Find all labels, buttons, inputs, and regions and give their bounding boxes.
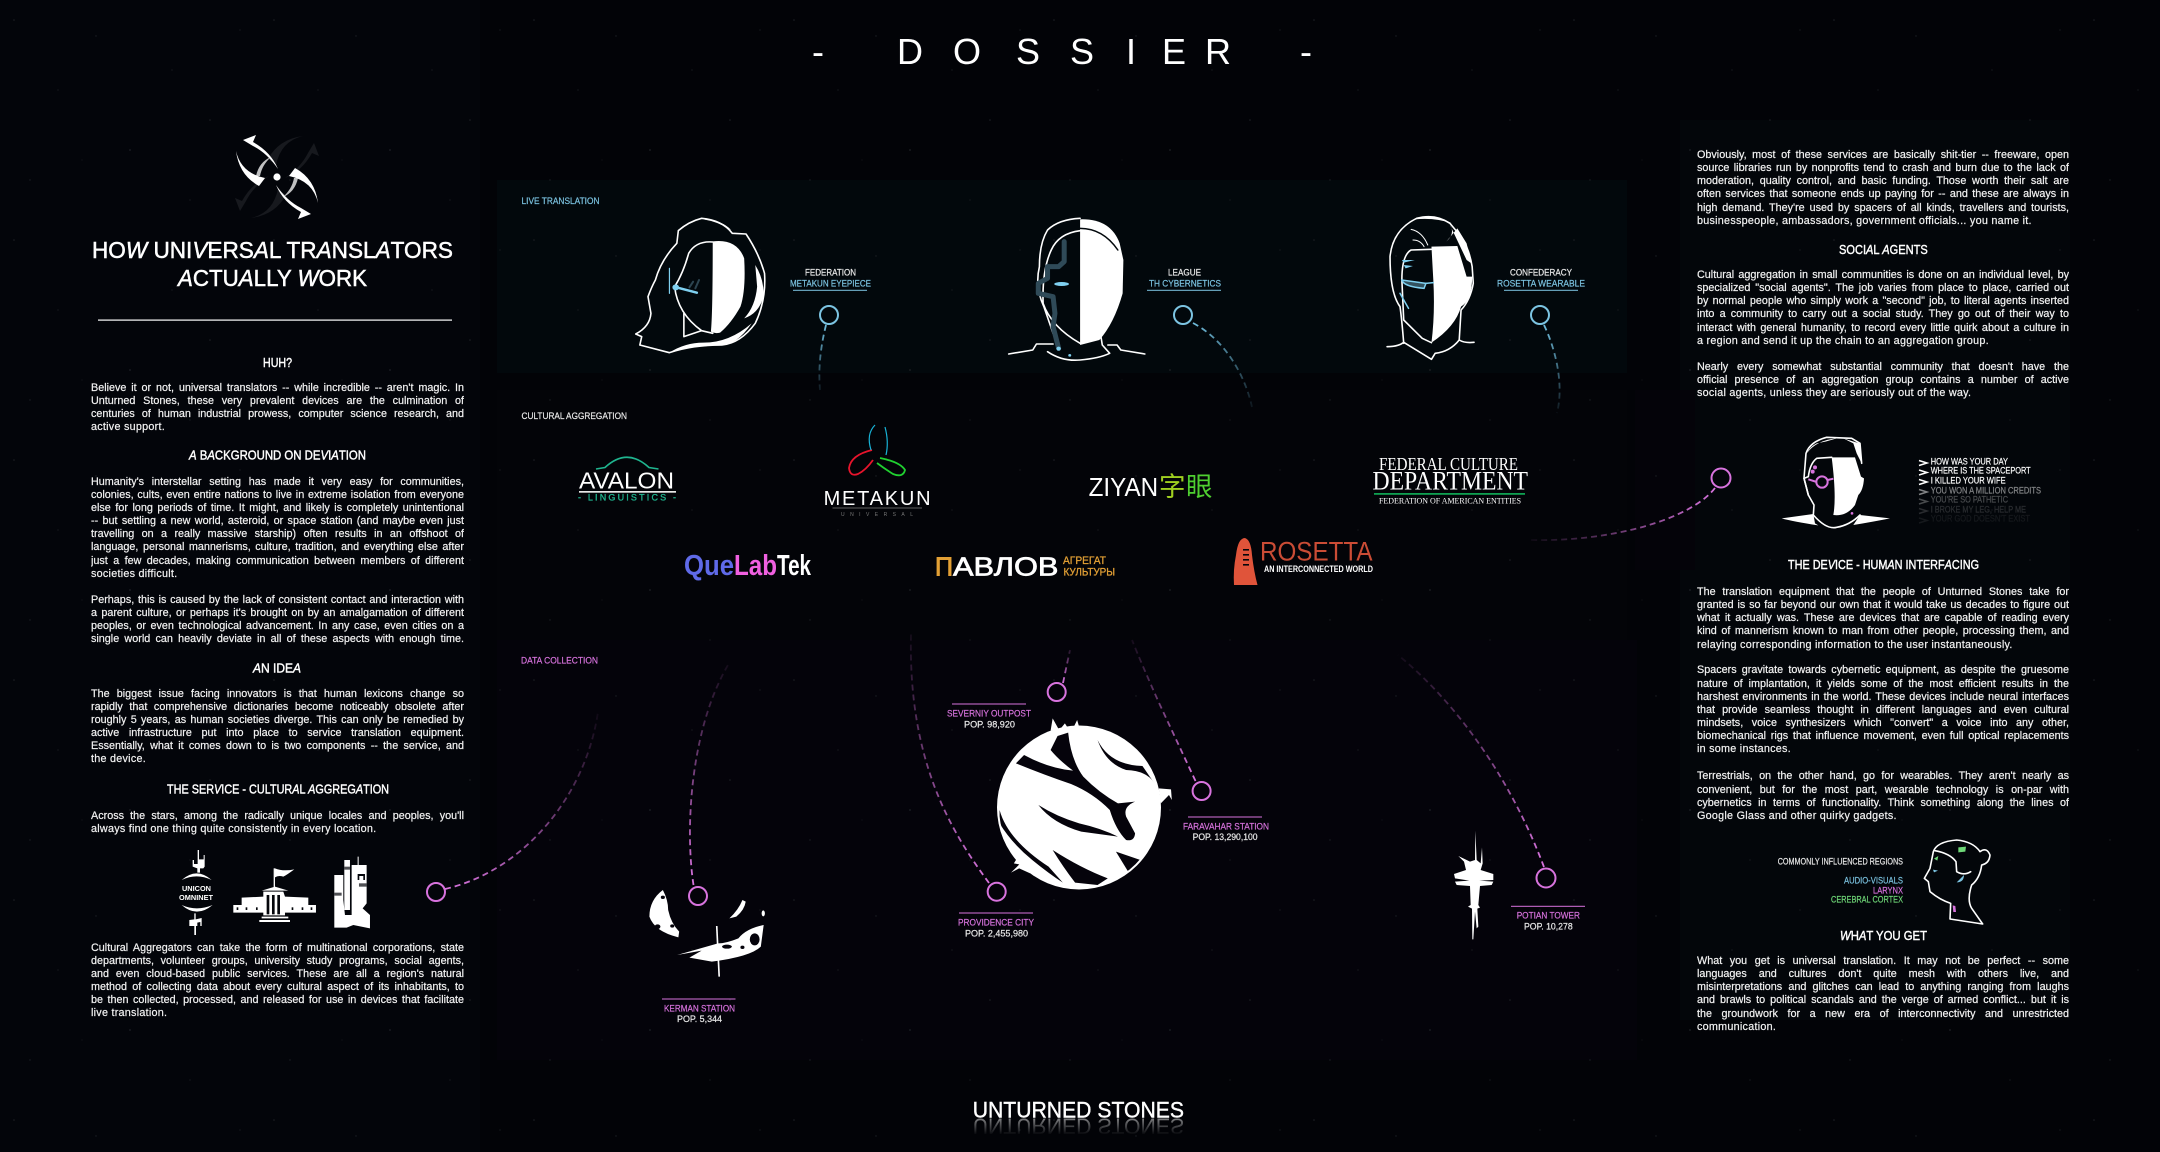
icon: kerman station asteroid	[649, 890, 765, 977]
logo: pavlov: АВЛОВ	[953, 552, 1058, 582]
label: potian tower: POP. 10,278	[1524, 921, 1573, 932]
text block: perhaps: peoples, or even technological advancement. In any case, even cities on a	[91, 620, 464, 632]
text block: spacers: mindsets, voice synthesizers which "convert" a voice into any other,	[1697, 717, 2069, 729]
icon: unicon omninet logo: OMNINET	[179, 893, 213, 902]
list: translated phrases: HOW WAS YOUR DAY	[1931, 456, 2009, 467]
label: league th cybernetics: TH CYBERNETICS	[1149, 279, 1221, 290]
text block: deviation	[91, 476, 464, 583]
icon: corporate towers	[334, 857, 370, 928]
panel: live translation background	[497, 180, 1627, 373]
text block: translation equipment	[1697, 586, 2069, 653]
icon: cybernetic head	[1782, 437, 1890, 528]
text block: across the stars: always find one thing quite consistently in every location.	[91, 823, 376, 835]
label: providence city: POP. 2,455,980	[965, 929, 1028, 940]
heading: a background on deviation: A BACKGROUND ON DEVIATION	[188, 448, 366, 462]
logo: federal culture department: DEPARTMENT	[1372, 466, 1528, 495]
text block: social agents: a region and send it up the chain to an aggregation group.	[1697, 335, 1989, 347]
callout: providence link	[911, 634, 1006, 901]
logo: quelabtek: Tek	[777, 550, 812, 582]
logo: ziyan: 眼	[1186, 472, 1212, 502]
main heading: HOW UNIVERSAL TRANSLATORS	[92, 237, 453, 263]
logo: federal culture department: FEDERATION OF AMERICAN ENTITIES	[1379, 496, 1521, 506]
text block: obviously: often services that someone ends up paying for -- and these are always in	[1697, 188, 2069, 200]
text block: terrestrials: Terrestrials, on the other hand, go for wearables. They aren't nearly as	[1697, 770, 2069, 782]
callout: severniy link	[1048, 650, 1070, 701]
logo: metakun universal: UNIVERSAL	[841, 512, 913, 518]
logo: rosetta	[1234, 537, 1373, 585]
text block: what you get: the groundwork for a new era of interconnectivity and unrestricted	[1697, 1008, 2069, 1020]
icon: universal translator emblem	[235, 135, 319, 219]
text block: idea: rapidly that comprehensive dictionaries become noticeably obsolete after	[91, 701, 464, 713]
text block: social agents: by normal people who simply work a "second" job, to literal agents inserted	[1697, 295, 2069, 307]
text block: perhaps	[91, 594, 464, 648]
text block: deviation: else for long periods of time. It might, and likely is completely unintentional	[91, 502, 464, 514]
callout: cultural aggregators link	[427, 712, 598, 901]
text block: cultural aggregators: departments, volunteer groups, university study programs, social agents,	[91, 955, 464, 967]
panel: right column	[1530, 149, 2069, 1035]
heading: cultural aggregation: CULTURAL AGGREGATION	[522, 411, 627, 422]
logo: ziyan	[1089, 472, 1212, 502]
list: translated phrases: YOUR GOD DOESN'T EXIST	[1931, 514, 2030, 525]
text block: idea: the device.	[91, 753, 146, 765]
text block: spacers: Spacers gravitate towards cybernetic equipment, as despite the gruesome	[1697, 664, 2069, 676]
label: severniy outpost	[947, 704, 1031, 731]
list: translated phrases: I BROKE MY LEG, HELP ME	[1931, 504, 2026, 515]
logo: quelabtek	[684, 550, 812, 582]
legend: commonly influenced regions: AUDIO-VISUALS	[1844, 875, 1903, 886]
heading: the service: THE SERVICE - CULTURAL AGGREGATION	[167, 782, 389, 796]
text block: obviously	[1697, 149, 2069, 229]
heading: the device: THE DEVICE - HUMAN INTERFACING	[1788, 558, 1979, 572]
text block: translation equipment: relaying corresponding information to the user instantaneously.	[1697, 639, 2013, 651]
text block: obviously: Obviously, most of these services are basically shit-tier -- freeware, open	[1697, 149, 2069, 161]
icon: unicon omninet logo: UNICON	[182, 884, 211, 893]
logo: rosetta: ROSETTA	[1260, 537, 1373, 567]
text block: intro: centuries of human industrial prowess, computer science research, and	[91, 408, 464, 420]
list: translated phrases	[1919, 456, 2041, 525]
label: potian tower	[1511, 906, 1585, 932]
text block: translation equipment: kind of mannerism known to man from other people, processing them, and	[1697, 625, 2069, 637]
callout: federation link	[819, 306, 838, 390]
icon: planet	[997, 718, 1172, 890]
label: providence city	[958, 912, 1035, 940]
text block: terrestrials: cybernetics in terms of functionality. Think something along the lines of	[1697, 797, 2069, 809]
label: providence city: PROVIDENCE CITY	[958, 918, 1035, 929]
text block: translation equipment: The translation equipment that the people of Unturned Stones take for	[1697, 586, 2069, 598]
label: kerman station: POP. 5,344	[677, 1014, 722, 1025]
label: severniy outpost: POP. 98,920	[964, 720, 1015, 731]
text block: terrestrials: Google Glass and other quirky gadgets.	[1697, 810, 1897, 822]
text block: nearly every	[1697, 361, 2069, 402]
heading: an idea: AN IDEA	[252, 662, 301, 676]
heading: live translation: LIVE TRANSLATION	[522, 196, 600, 207]
text block: deviation: societies difficult.	[91, 568, 177, 580]
icon: government building	[233, 868, 316, 922]
text block: social agents: interact with general humanity, to record every little quirk about a culture in	[1697, 322, 2069, 334]
text block: what you get	[1697, 955, 2069, 1035]
text block: social agents: into a community to carry out a social study. They go out of their way to	[1697, 308, 2069, 320]
logo: pavlov: П	[935, 552, 953, 582]
label: faravahar station: POP. 13,290,100	[1193, 832, 1258, 843]
logo: quelabtek: Lab	[734, 550, 777, 582]
text block: deviation: just a few decades, making communication between members of different	[91, 555, 464, 567]
label: league th cybernetics	[1147, 267, 1221, 291]
text block: what you get: misinterpretations and glitches can lead to anything ranging from laughs	[1697, 981, 2069, 993]
text block: perhaps: single world can heavily deviate in all of these aspects with enough time.	[91, 633, 464, 645]
text block: deviation: colonies, cults, even entire nations to live in extreme isolation from everyone	[91, 489, 464, 501]
legend: commonly influenced regions: CEREBRAL CORTEX	[1831, 894, 1904, 905]
heading: what you get: WHAT YOU GET	[1840, 929, 1927, 943]
text block: idea: The biggest issue facing innovators is that human lexicons change so	[91, 688, 464, 700]
icon: confederacy head with wearable	[1387, 217, 1474, 359]
text block: spacers: harshest environments in the world. These devices include neural interfaces	[1697, 691, 2069, 703]
text block: idea: Essentially, what it comes down to is two components -- the service, and	[91, 740, 464, 752]
callout: confederacy link	[1531, 306, 1560, 413]
logo: metakun universal	[824, 425, 931, 518]
text block: spacers	[1697, 664, 2069, 758]
text block: spacers: that provide seamless thought in different languages and even cultural	[1697, 704, 2069, 716]
text block: intro	[91, 382, 464, 436]
text block: obviously: source libraries run by nonprofits tend to crash and burn due to the lack of	[1697, 162, 2069, 174]
text block: cultural aggregators	[91, 942, 464, 1022]
text block: intro: active support.	[91, 421, 165, 433]
text block: intro: Believe it or not, universal translators -- while incredible -- aren't magic. In	[91, 382, 464, 394]
label: kerman station: KERMAN STATION	[664, 1004, 735, 1015]
page title: -	[1300, 31, 1312, 72]
icon: unicon omninet logo	[179, 850, 213, 935]
text block: terrestrials: convenient, but for the most part, wearable technology is on-par with	[1697, 784, 2069, 796]
label: federation metakun eyepiece: METAKUN EYEPIECE	[790, 279, 871, 290]
callout: faravahar link	[1132, 640, 1211, 800]
text block: translation equipment: granted is so far beyond our own that it would take us decades to figure out	[1697, 599, 2069, 611]
text block: cultural aggregators: be then collected, processed, and released for use in devices that facilitate	[91, 994, 464, 1006]
logo: quelabtek: Que	[684, 550, 734, 582]
text block: nearly every: official presence of an aggregation group contains a number of active	[1697, 374, 2069, 386]
page title: -	[812, 31, 824, 72]
text block: idea: roughly 5 years, as human societies diverge. This can only be remedied by	[91, 714, 464, 726]
label: kerman station	[662, 998, 736, 1025]
text block: deviation: travelling on a really massive starship) often results in an offshoot of	[91, 528, 464, 540]
text block: social agents: Cultural aggregation in small communities is done on an individual level, by	[1697, 269, 2069, 281]
logo: rosetta: AN INTERCONNECTED WORLD	[1264, 564, 1373, 574]
text block: what you get: and brawls to political scandals and the verge of armed conflict... but it is	[1697, 994, 2069, 1006]
label: federation metakun eyepiece	[790, 267, 871, 291]
heading: huh: HUH?	[263, 356, 292, 370]
logo: avalon linguistics	[578, 457, 676, 503]
text block: deviation: Humanity's interstellar setting has made it very easy for communities,	[91, 476, 464, 488]
logo: federal culture department: FEDERAL CULTURE	[1379, 454, 1518, 474]
label: faravahar station: FARAVAHAR STATION	[1183, 821, 1269, 832]
label: potian tower: POTIAN TOWER	[1517, 911, 1580, 922]
text block: social agents: specialized "social agents". The job varies from place to place, carried out	[1697, 282, 2069, 294]
logo: avalon linguistics: - LINGUISTICS -	[578, 493, 676, 503]
label: faravahar station	[1183, 816, 1269, 843]
text block: social agents	[1697, 269, 2069, 349]
panel: data collection background	[497, 640, 1637, 1060]
text block: obviously: businesspeople, ambassadors, government officials... you name it.	[1697, 215, 2032, 227]
list: translated phrases: YOU'RE SO PATHETIC	[1931, 495, 2008, 506]
text block: idea: active infrastructure put into place to service translation equipment.	[91, 727, 464, 739]
callout: league link	[1174, 306, 1252, 407]
text block: nearly every: Nearly every somewhat substantial community that doesn't have the	[1697, 361, 2069, 373]
legend: commonly influenced regions: LARYNX	[1873, 885, 1904, 896]
icon: league head with cybernetics	[1009, 218, 1145, 360]
text block: deviation: language, personal mannerisms, culture, tradition, and everything else after	[91, 541, 464, 553]
text block: obviously: moderation, quality control, and basic funding. Those worth their salt are	[1697, 175, 2069, 187]
icon: federation head with eyepiece	[636, 218, 765, 353]
text block: what you get: languages and cultures don't quite mesh with others live, and	[1697, 968, 2069, 980]
logo: pavlov: КУЛЬТУРЫ	[1064, 567, 1115, 579]
page title	[812, 31, 1312, 72]
callout: device link	[1530, 468, 1730, 540]
text block: idea	[91, 688, 464, 768]
main heading: ACTUALLY WORK	[176, 265, 367, 291]
text block: perhaps: a parent culture, or perhaps it's brought on by an amalgamation of different	[91, 607, 464, 619]
text block: cultural aggregators: live translation.	[91, 1007, 167, 1019]
list: translated phrases: I KILLED YOUR WIFE	[1931, 475, 2006, 486]
text block: intro: Unturned Stones, these very prevalent devices are the culmination of	[91, 395, 464, 407]
label: severniy outpost: SEVERNIY OUTPOST	[947, 709, 1031, 720]
label: federation metakun eyepiece: FEDERATION	[805, 267, 856, 278]
footer: unturned stones wordmark: UNTURNED STONES	[973, 1113, 1184, 1138]
panel: left column introduction	[91, 135, 598, 1022]
list: translated phrases: WHERE IS THE SPACEPORT	[1931, 466, 2031, 477]
text block: obviously: high demand. They're used by spacers of all kinds, travellers and tourists,	[1697, 202, 2069, 214]
callout: kerman link	[689, 665, 728, 905]
text block: cultural aggregators: and even cloud-based public services. These are all a region's natural	[91, 968, 464, 980]
text block: cultural aggregators: method of collecting data about every cultural aspect of its inhabitants, to	[91, 981, 464, 993]
text block: perhaps: Perhaps, this is caused by the lack of consistent contact and interaction with	[91, 594, 464, 606]
text block: spacers: in some instances.	[1697, 743, 1791, 755]
text block: across the stars	[91, 810, 464, 838]
logo: pavlov	[935, 552, 1115, 582]
icon: head profile with regions	[1924, 840, 1990, 924]
legend: commonly influenced regions: COMMONLY INFLUENCED REGIONS	[1778, 856, 1903, 867]
label: confederacy rosetta wearable: ROSETTA WEARABLE	[1497, 279, 1585, 290]
text block: what you get: What you get is universal translation. It may not be perfect -- some	[1697, 955, 2069, 967]
logo: ziyan: ZIYAN	[1089, 474, 1158, 502]
text block: translation equipment: what it actually was. These are devices that are capable of reading every	[1697, 612, 2069, 624]
label: confederacy rosetta wearable	[1497, 267, 1585, 291]
main heading	[92, 237, 453, 291]
logo: pavlov: АГРЕГАТ	[1063, 555, 1106, 567]
text block: nearly every: social agents, unless they are seriously out of the way.	[1697, 387, 1971, 399]
heading: social agents: SOCIAL AGENTS	[1839, 243, 1928, 257]
heading: data collection: DATA COLLECTION	[521, 656, 598, 666]
legend: commonly influenced regions	[1778, 856, 1904, 905]
panel: cultural aggregation background	[497, 390, 1627, 640]
logo: avalon linguistics: AVALON	[579, 467, 674, 493]
text block: deviation: -- but settling a new world, asteroid, or space station (and maybe even just	[91, 515, 464, 527]
text block: across the stars: Across the stars, among the radically unique locales and peoples, you'll	[91, 810, 464, 822]
label: confederacy rosetta wearable: CONFEDERACY	[1510, 267, 1573, 278]
page title: DOSSIER	[897, 31, 1231, 72]
label: league th cybernetics: LEAGUE	[1168, 267, 1201, 278]
icon: potian tower	[1454, 831, 1493, 939]
text block: spacers: biomechanical rigs that influence movement, even full optical replacements	[1697, 730, 2069, 742]
text block: cultural aggregators: Cultural Aggregators can take the form of multinational corporations, state	[91, 942, 464, 954]
list: translated phrases: YOU WON A MILLION CREDITS	[1931, 485, 2041, 496]
footer: unturned stones wordmark: UNTURNED STONES	[973, 1098, 1184, 1123]
text block: what you get: communication.	[1697, 1021, 1776, 1033]
logo: federal culture department	[1372, 454, 1528, 506]
text block: spacers: nature of implantation, it yields some of the most efficient results in the	[1697, 678, 2069, 690]
logo: ziyan: 字	[1159, 472, 1186, 502]
callout: potian link	[1398, 655, 1556, 888]
text block: terrestrials	[1697, 770, 2069, 824]
logo: metakun universal: METAKUN	[824, 488, 931, 510]
footer: unturned stones wordmark	[973, 1098, 1184, 1138]
